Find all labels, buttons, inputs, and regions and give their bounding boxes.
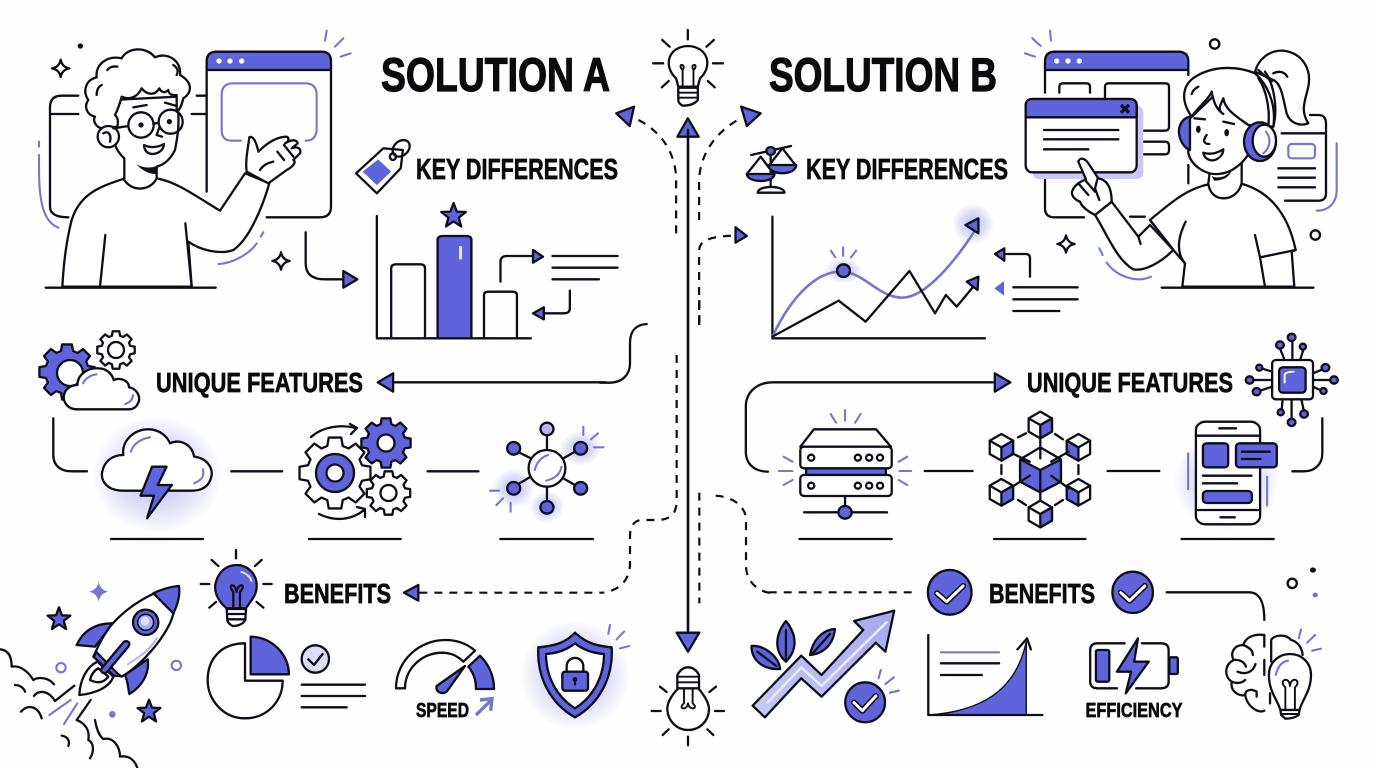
checklist: [302, 645, 365, 707]
unique features A panel: [53, 373, 606, 539]
dashed arrow to benefits: [404, 585, 603, 601]
line chart: [772, 203, 994, 338]
icon: balance scale: [747, 146, 796, 193]
icon: blockchain cubes: [990, 412, 1090, 527]
heading: key differences B: KEY DIFFERENCES: [806, 154, 1008, 186]
central connectors: [600, 300, 775, 603]
main browser window: [207, 52, 331, 217]
headphones: [1179, 117, 1276, 161]
icon: microchip: [1246, 334, 1338, 426]
unique features B panel: [746, 334, 1338, 539]
icon: star above bar: [441, 203, 466, 226]
arrow to heading: [746, 373, 1010, 472]
icon: network hub: [490, 423, 604, 523]
icon: speed gauge: [396, 640, 494, 715]
illustration: person A presenting window: [39, 31, 357, 288]
icon: check badge left: [928, 570, 972, 615]
icon: price tag: [356, 138, 413, 193]
person head and hair: [85, 49, 190, 189]
back browser window: [1045, 52, 1188, 217]
person body: [62, 173, 269, 287]
heading: benefits B: BENEFITS: [989, 578, 1095, 609]
arrow to heading: [378, 373, 606, 392]
icon: rocket launch: [0, 586, 179, 768]
label: speed: SPEED: [416, 700, 469, 722]
decorative stars and rings: [48, 582, 181, 721]
central arrow head bottom: [677, 633, 699, 652]
icon: mobile app: [1174, 422, 1279, 530]
icon: security shield: [520, 620, 630, 730]
dashed and solid flow lines: [600, 300, 775, 603]
icon: bright light bulb: [201, 550, 272, 626]
benefits A panel right: [396, 585, 724, 745]
back window: [50, 96, 207, 217]
icon: growth arrow: [751, 611, 899, 722]
heading: unique features A: UNIQUE FEATURES: [156, 367, 363, 398]
area growth chart: [928, 635, 1042, 715]
decorative dots: [1288, 567, 1318, 597]
title: solution B: SOLUTION B: [769, 48, 997, 101]
heading: key differences A: KEY DIFFERENCES: [416, 154, 618, 186]
central double arrow line: [687, 130, 689, 640]
icon: brain and bulb: [1226, 629, 1321, 719]
bar chart: [377, 216, 531, 338]
person B body: [1095, 163, 1296, 287]
line chart annotations: [994, 248, 1078, 311]
connector lines: [53, 418, 478, 471]
icon: battery: [1090, 638, 1178, 693]
icon: server: [779, 410, 911, 519]
right side panel: [1278, 115, 1337, 211]
icon: process gears: [300, 418, 411, 519]
dashed line to benefits: [769, 591, 914, 593]
dashed arrows to headings: [616, 107, 761, 325]
connector to brain: [1167, 592, 1264, 620]
arrow to bar chart: [306, 232, 357, 288]
chart bars: [391, 236, 517, 338]
icon: top light bulb: [653, 30, 723, 106]
central arrow head top: [677, 118, 699, 137]
sparkle accents: [39, 31, 351, 270]
bar chart annotations: [500, 250, 618, 319]
pointing hand: [1072, 159, 1112, 215]
benefits B panel: [751, 567, 1321, 722]
ponytail: [1255, 51, 1309, 125]
illustration: person B with headphones: [1025, 31, 1337, 288]
heading: benefits A: BENEFITS: [284, 578, 391, 609]
popup window: [1026, 99, 1143, 179]
caption lines: [800, 538, 1274, 540]
base line: [1162, 287, 1313, 289]
pie chart: [208, 637, 289, 718]
sparkle accents: [1025, 31, 1320, 279]
icon: check badge right: [1112, 572, 1153, 613]
person B head: [1184, 68, 1275, 181]
icon: storm cloud: [92, 417, 222, 533]
center and key differences panel: [356, 30, 994, 338]
benefits A panel left: [0, 550, 365, 768]
caption lines: [111, 538, 593, 540]
icon: bottom light bulb: [652, 667, 724, 745]
heading: unique features B: UNIQUE FEATURES: [1027, 367, 1233, 398]
person hand: [246, 137, 300, 183]
title: solution A: SOLUTION A: [381, 48, 610, 101]
icon: settings gears with cloud: [39, 331, 139, 409]
base line: [46, 287, 216, 289]
label: efficiency: EFFICIENCY: [1086, 700, 1183, 722]
connector lines: [925, 418, 1322, 471]
